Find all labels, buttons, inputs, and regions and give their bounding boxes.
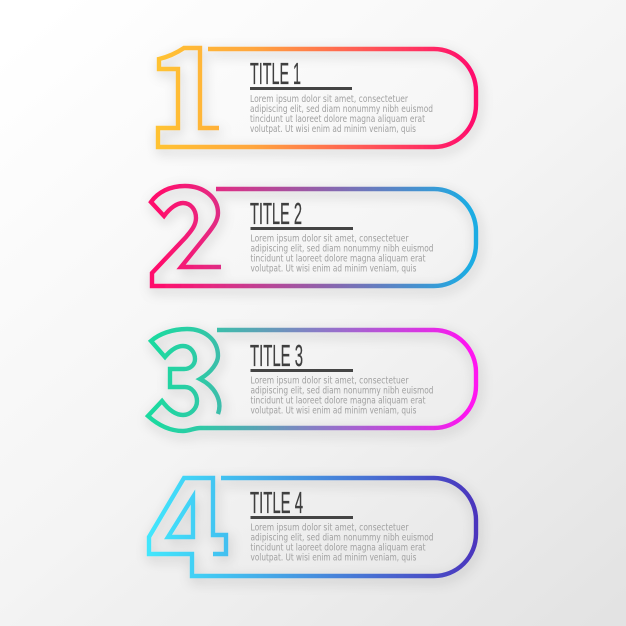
body text 2: tincidunt ut laoreet dolore magna aliquam erat (250, 254, 426, 264)
title rule 1 (250, 87, 352, 90)
body text 1: Lorem ipsum dolor sit amet, consectetuer (250, 94, 409, 105)
title rule 2 (250, 227, 353, 230)
panel: step 4: TITLE 4 (250, 485, 303, 520)
panel: step 2 (151, 186, 476, 286)
number 4 outline and frame (149, 478, 476, 576)
body text 4 (250, 522, 434, 564)
number 2 outline and frame (151, 186, 476, 286)
panel: step 3 (148, 329, 476, 431)
panel: step 3: TITLE 3 (250, 338, 303, 373)
body text 3: adipiscing elit, sed diam nonummy nibh euismod (250, 386, 434, 396)
body text 1: adipiscing elit, sed diam nonummy nibh euismod (250, 104, 433, 115)
body text 2: adipiscing elit, sed diam nonummy nibh euismod (250, 244, 434, 254)
body text 3: volutpat. Ut wisi enim ad minim veniam, quis (250, 406, 416, 416)
panel: step 1 (158, 48, 476, 147)
panel: step 4 (149, 478, 476, 576)
body text 1: volutpat. Ut wisi enim ad minim veniam, quis (250, 124, 416, 135)
body text 1 (250, 94, 433, 135)
body text 2 (250, 234, 434, 274)
title rule 3 (250, 369, 353, 372)
body text 3: Lorem ipsum dolor sit amet, consectetuer (250, 376, 409, 386)
panel: step 1: TITLE 1 (250, 56, 301, 91)
body text 2: volutpat. Ut wisi enim ad minim veniam, quis (250, 264, 416, 274)
body text 4: adipiscing elit, sed diam nonummy nibh euismod (250, 532, 434, 544)
body text 1: tincidunt ut laoreet dolore magna aliquam erat (250, 114, 425, 125)
panel: step 2: TITLE 2 (250, 196, 302, 231)
body text 4: volutpat. Ut wisi enim ad minim veniam, quis (250, 552, 416, 564)
body text 4: tincidunt ut laoreet dolore magna aliquam erat (250, 542, 426, 554)
body text 2: Lorem ipsum dolor sit amet, consectetuer (250, 234, 409, 244)
body text 3 (250, 376, 434, 416)
body text 3: tincidunt ut laoreet dolore magna aliquam erat (250, 396, 426, 406)
title rule 4 (250, 516, 353, 519)
number 3 outline and frame (148, 329, 476, 431)
body text 4: Lorem ipsum dolor sit amet, consectetuer (250, 522, 409, 534)
number 1 outline and frame (158, 48, 476, 147)
